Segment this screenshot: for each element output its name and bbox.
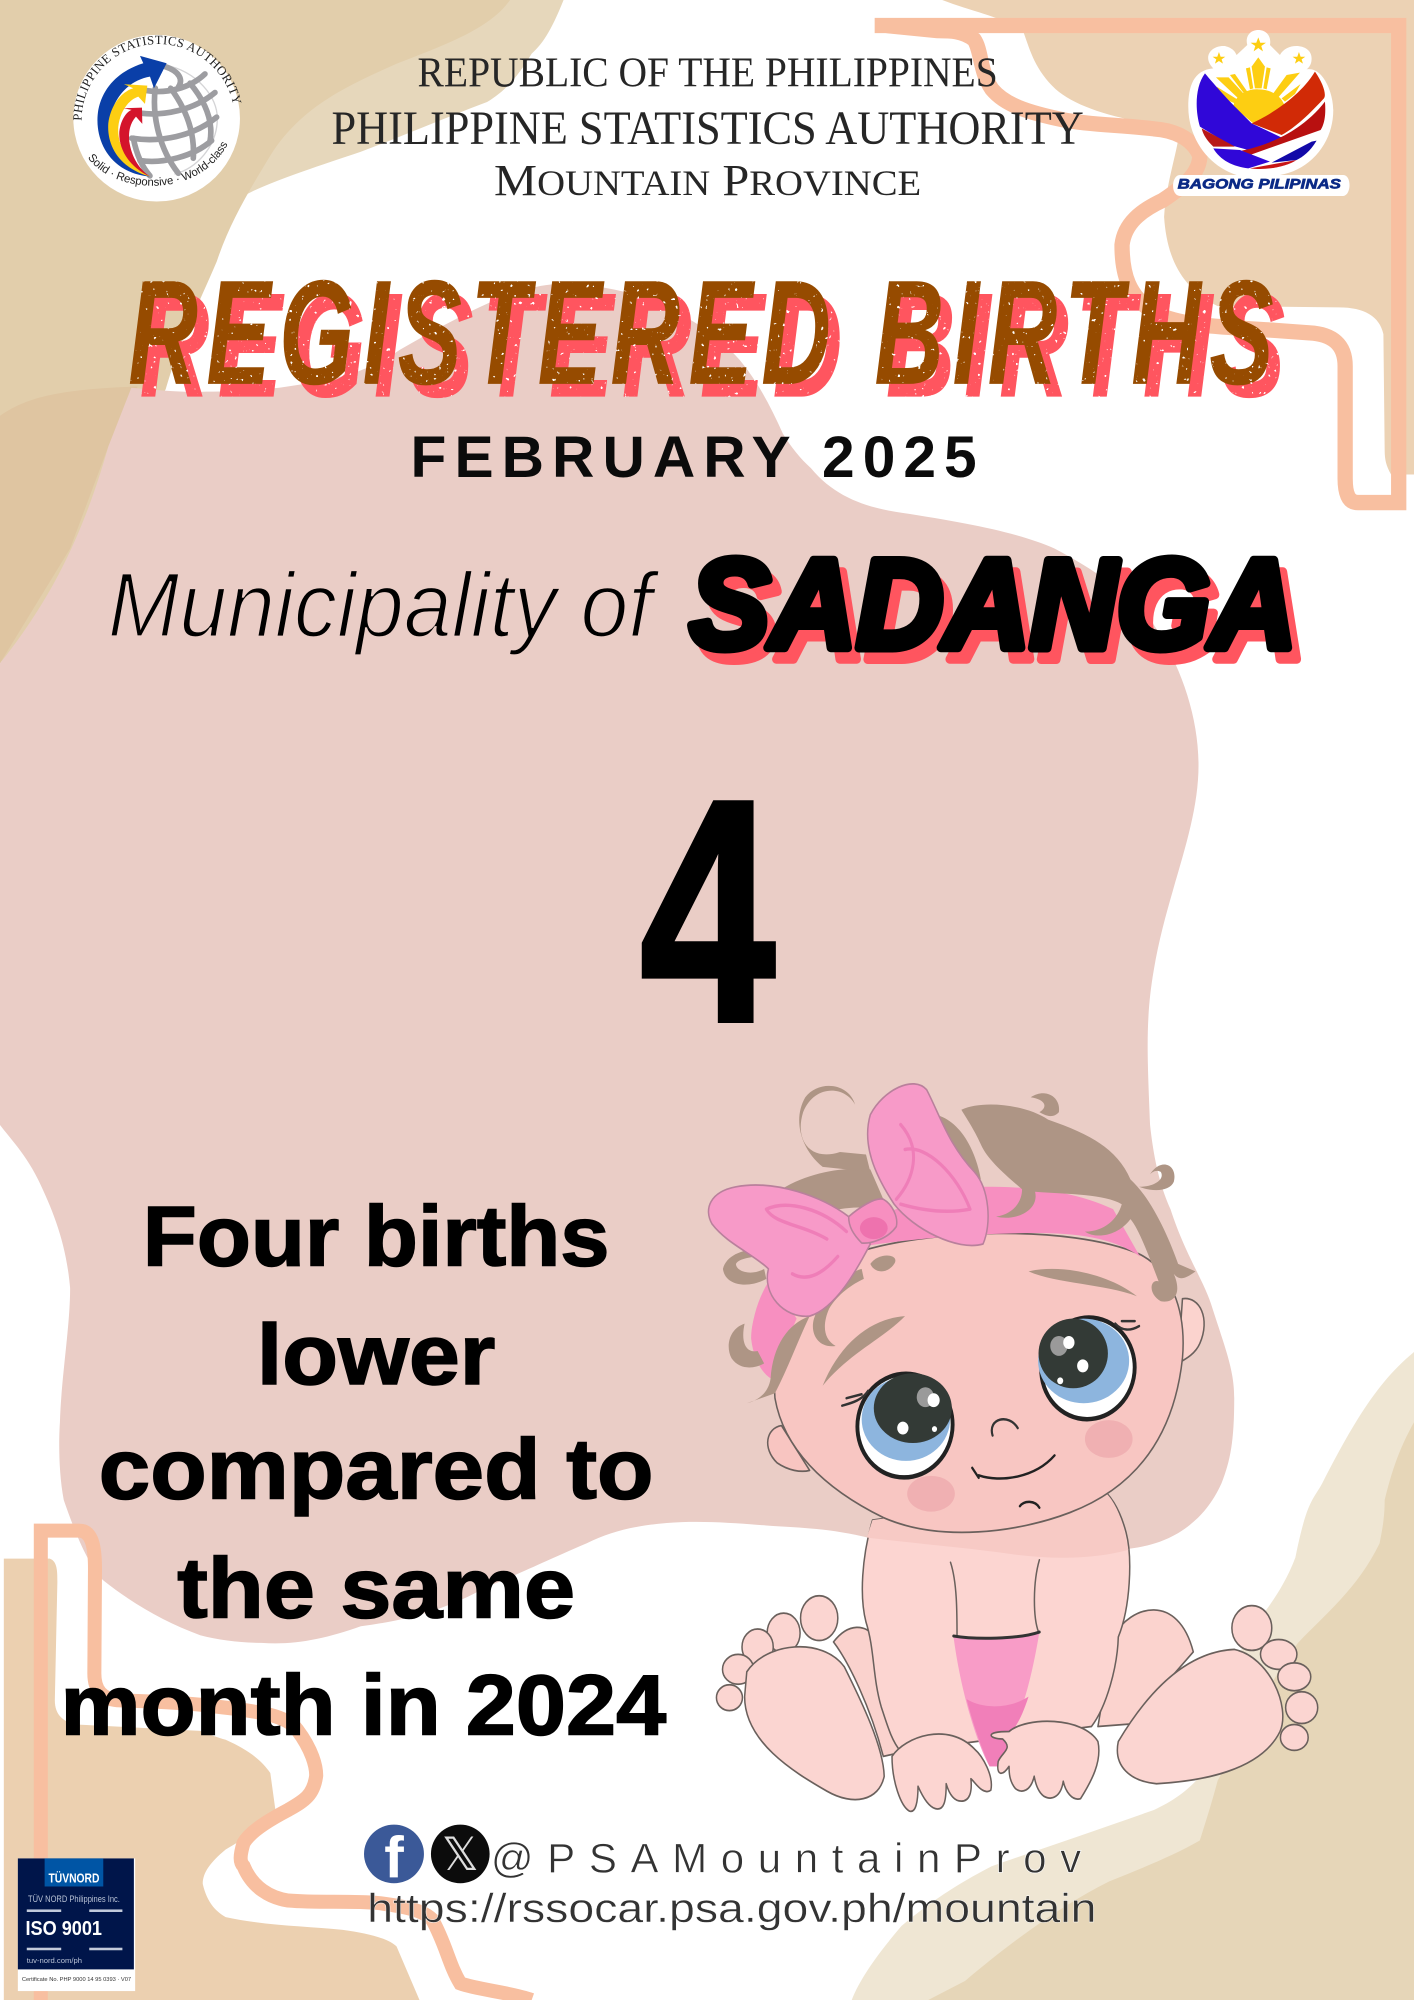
bow knot — [849, 1199, 897, 1243]
label: municipality of: Municipality of — [108, 554, 660, 656]
heading: agency name — [332, 51, 1084, 205]
heading face: SADANGA — [690, 534, 1297, 676]
diaper — [954, 1632, 1039, 1766]
left foot — [716, 1596, 884, 1800]
social handle: @PSAMountainProv — [491, 1834, 1081, 1881]
bow right loop — [868, 1084, 988, 1245]
statement line 5: month in 2024 — [61, 1659, 667, 1754]
left eye — [850, 1365, 960, 1486]
statement line 3: compared to — [99, 1423, 653, 1518]
seal top text: PHILIPPINE STATISTICS AUTHORITY — [73, 36, 242, 120]
big number: 4 — [640, 735, 777, 1088]
sun — [1216, 57, 1301, 123]
title: Registered Births — [128, 249, 1294, 429]
heading: Sadanga — [690, 534, 1306, 687]
statement text — [61, 1189, 667, 1754]
back thighs — [833, 1627, 905, 1756]
baby illustration — [708, 1084, 1318, 1811]
background: pink blob — [0, 284, 1234, 1643]
badge: ISO 9001 — [18, 1858, 135, 1991]
website: https://rssocar.psa.gov.ph/mountain — [367, 1885, 1097, 1931]
logo: Philippine Statistics Authority seal — [73, 34, 242, 202]
logo wordmark: BAGONG PILIPINAS — [1178, 176, 1342, 192]
statement line 1: Four births — [143, 1189, 609, 1284]
hair back — [781, 1169, 888, 1224]
yellow arrow — [108, 84, 150, 177]
icon: X: 𝕏 — [442, 1828, 479, 1880]
badge standard: ISO 9001 — [26, 1918, 102, 1940]
stars — [1213, 37, 1305, 64]
subtitle: date: FEBRUARY 2025 — [411, 425, 977, 490]
logo: Bagong Pilipinas — [1173, 30, 1350, 196]
right hand — [991, 1721, 1099, 1799]
statement line 4: the same — [177, 1541, 575, 1636]
body — [862, 1488, 1130, 1751]
line: republic: REPUBLIC OF THE PHILIPPINES — [418, 51, 998, 97]
mouth — [972, 1455, 1055, 1508]
icon: facebook — [364, 1825, 424, 1891]
background: bottom-right tan shapes — [852, 1352, 1414, 2000]
red arrow — [119, 108, 150, 177]
background: bottom-left tan shape — [4, 1559, 419, 2000]
red band — [1252, 72, 1325, 135]
background: top-left tan shapes — [0, 0, 564, 663]
badge url: tuv-nord.com/ph — [27, 1956, 82, 1965]
ears — [768, 1426, 810, 1471]
left hand — [892, 1734, 991, 1811]
right eye — [1034, 1309, 1142, 1428]
line: agency: PHILIPPINE STATISTICS AUTHORITY — [332, 103, 1084, 155]
head — [775, 1233, 1183, 1532]
seal motto text: Solid · Responsive · World-class — [88, 142, 227, 187]
background: top-right tan shape — [942, 0, 1414, 474]
badge brand: TÜVNORD — [48, 1871, 99, 1886]
line: province: MOUNTAIN PROVINCE — [494, 155, 921, 205]
right foot — [1117, 1606, 1318, 1784]
bow left loop — [708, 1185, 870, 1316]
background: bottom-left orange line — [41, 1531, 532, 2000]
statement line 2: lower — [257, 1308, 495, 1403]
blue arrow — [97, 56, 167, 177]
icon: X — [431, 1825, 490, 1883]
badge certificate: Certificate No. PHP 9000 14 95 0393 · V07 — [22, 1977, 131, 1983]
brows — [823, 1269, 1137, 1386]
badge company: TÜV NORD Philippines Inc. — [28, 1894, 120, 1904]
nose — [992, 1419, 1018, 1436]
globe — [132, 65, 217, 176]
blue band — [1197, 73, 1283, 150]
background: top-right orange line — [875, 26, 1399, 503]
hair curls — [723, 1086, 1195, 1403]
heading shadow: SADANGA — [699, 545, 1306, 687]
icon: facebook: f — [384, 1826, 404, 1891]
headband — [751, 1187, 1140, 1339]
cheeks — [907, 1420, 1133, 1512]
